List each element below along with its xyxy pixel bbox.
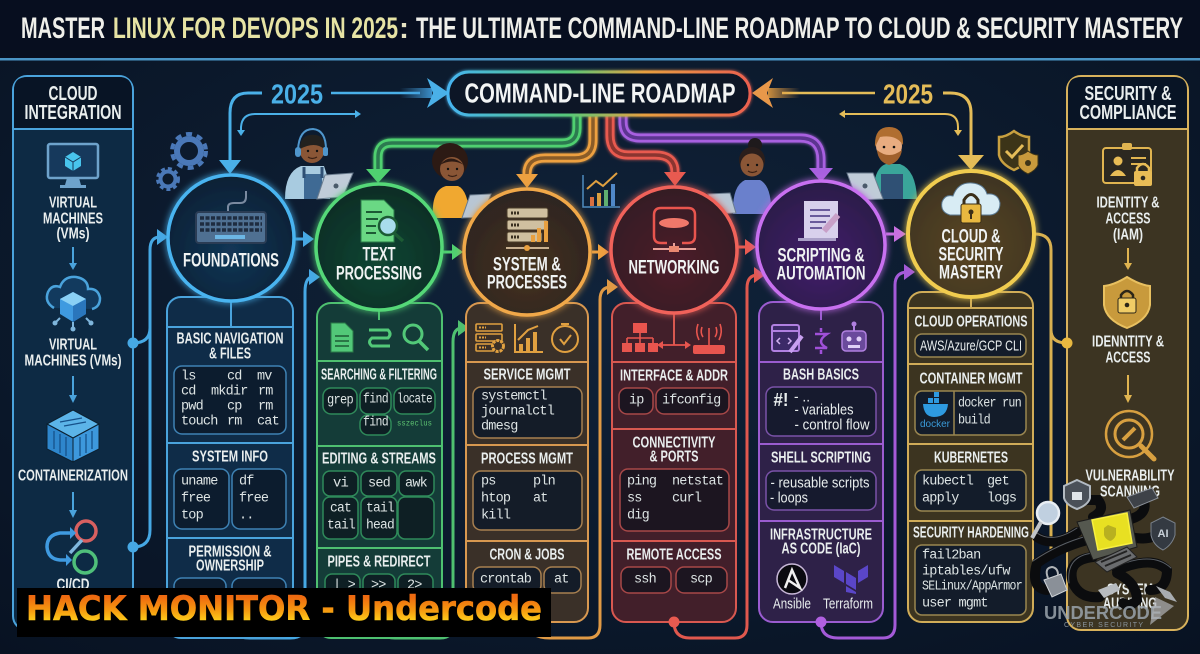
panel: cloud column: SECURITY HARDENING [913,524,1029,542]
icon: document search [361,200,403,242]
panel: networking column: REMOTE ACCESS [626,546,722,564]
icon: octopus mascot with laptop: AI [1158,528,1168,540]
panel: cloud column: kubectl [922,474,974,490]
panel: networking column: dig [627,508,649,524]
stage: system and processes [464,189,590,622]
panel: networking column: & PORTS [650,448,699,466]
panel: system column: pln [533,474,555,490]
text processing circle: PROCESSING [336,264,422,284]
icon: network tree and router [622,323,725,354]
panel: text processing column: 2> [407,578,422,594]
panel: scripting column: - variables [794,402,854,418]
panel: scripting column: - control flow [794,416,870,434]
panel: system column: PROCESS MGMT [481,450,573,468]
scripting circle [757,181,885,309]
panel: networking column: ip [629,394,644,408]
icon: docker: docker [920,419,951,430]
panel: foundations column: rm [227,414,242,430]
panel: foundations column: .. [239,508,254,524]
arrow: right 2025 to roadmap [752,78,984,170]
stage: networking [611,187,737,628]
panel: text processing column: tail [327,518,356,534]
plug [1156,586,1177,602]
top shield [1064,480,1090,509]
banner: hack monitor: HACK MONITOR - Undercode [26,589,542,629]
title band [0,0,1200,60]
panel: security and compliance: AUDITING [1103,596,1157,612]
panel: cloud integration: MACHINES (VMs) [24,352,122,370]
cloud circle [908,171,1034,297]
panel: networking column [612,303,736,628]
icon: person with yellow shirt [432,143,491,218]
watermark: undercode [1044,597,1174,629]
panel: text processing column: vi [333,476,349,492]
panel: networking column: ssh [634,572,656,588]
arrow: left 2025 to roadmap [219,78,449,174]
panel: text processing column: sszeclus [397,420,432,428]
icon: gears [158,134,206,190]
panel: cloud column: AWS/Azure/GCP CLI [920,338,1022,354]
stage: cloud and security mastery [908,171,1034,622]
panel: security and compliance: IDENNTITY & [1092,334,1164,350]
panel: text processing column: EDITING & STREAMS [322,450,436,468]
cloud circle: SECURITY [938,244,1004,266]
panel: foundations column: cat [257,414,279,430]
title: LINUX FOR DEVOPS IN 2025 [113,12,398,45]
panel: cloud column: build [958,414,990,428]
title: MASTER [21,12,105,45]
panel: foundations column: cd [227,370,242,384]
watermark: undercode: CYBER SECURITY [1064,622,1143,629]
connector dots on side panels [128,338,1072,552]
panel: system column: htop [481,492,511,506]
panel: text processing column: find [363,392,388,408]
connector arrowheads [157,226,915,336]
panel: text processing column [317,303,442,638]
panel: foundations column: SYSTEM INFO [192,448,268,466]
panel: foundations column: BASIC NAVIGATION [176,330,284,348]
system circle: PROCESSES [487,272,567,294]
panel: system column [466,303,588,622]
panel: security and compliance: ACCESS [1106,350,1151,366]
panel: security and compliance: SCANNING [1100,484,1160,500]
panel: text processing column: cat [330,502,351,516]
panel: networking column: ifconfig [662,394,720,408]
panel: foundations column: mv [257,370,272,384]
panel: foundations column: PERMISSION & [188,544,272,560]
panel: scripting column: - reusable scripts [770,474,870,492]
icon: keyboard [196,191,266,243]
AI shield [1151,517,1175,550]
networking circle [611,187,737,313]
arrow: right 2025 to roadmap: 2025 [883,78,933,110]
panel: system column: crontab [480,572,532,588]
panel: text processing column: SEARCHING & FILTERING [321,366,437,384]
panel: cloud integration: VIRTUAL [49,336,97,354]
watermark: undercode: UNDERCODE [1044,603,1162,623]
stage: scripting and automation [757,181,885,628]
foundations circle: FOUNDATIONS [183,250,279,272]
icon: person with headphones [285,129,353,199]
icon: ci/cd loops [47,521,96,573]
panel: cloud column: docker run [958,396,1021,412]
panel: system column: journalctl [481,404,555,420]
panel: foundations column: rm [258,384,273,400]
panel: cloud column: user mgmt [922,596,988,612]
magnifier [1037,502,1059,524]
panel: foundations column: top [181,508,204,524]
panel: system column: systemctl [481,390,547,404]
panel: cloud column: apply [922,492,959,506]
padlock [1044,574,1067,597]
icon: identity badge [1103,143,1152,186]
panel: scripting column: - .. [794,388,810,406]
panel: foundations column: touch [181,414,218,430]
panel: security and compliance: (IAM) [1113,226,1143,244]
icon: server chart stopwatch [476,324,578,352]
panel: scripting column: Terraform [823,596,873,612]
panel: networking column: ss [627,492,642,506]
icon: container cube [47,410,99,462]
panel: text processing column: awk [405,476,428,492]
text processing circle [316,184,442,310]
panel: scripting column: BASH BASICS [783,366,859,384]
panel: scripting column: Ansible [773,596,811,612]
icon: virtual machine monitor [48,144,98,188]
panel: scripting column: INFRASTRUCTURE [770,526,872,544]
panel: security and compliance [1067,76,1188,630]
panel: networking column: ping [627,474,656,490]
panel: foundations column: rm [258,400,273,414]
stage: foundations [167,175,294,638]
scripting circle: SCRIPTING & [778,246,865,266]
cloud circle: MASTERY [939,262,1003,284]
icon: bar chart [583,173,620,207]
panel: text processing column: find [363,416,388,430]
panel: networking column: INTERFACE & ADDR [620,368,728,384]
icon: security shields [999,131,1038,174]
panel: foundations column: cp [227,400,242,414]
icon: cloud cube [47,277,100,332]
icon: code robot [772,322,866,354]
networking circle: NETWORKING [628,258,720,278]
panel: cloud integration: CI/CD [56,576,90,594]
usb [1098,583,1120,598]
panel: text processing column: grep [327,394,354,408]
panel: cloud integration: INTEGRATION [24,102,122,124]
panel: cloud column [908,292,1033,622]
panel: foundations column: free [181,492,211,506]
connector lines between stages [133,234,1067,638]
panel: scripting column: - loops [770,490,808,506]
panel: text processing column: tail [366,502,395,516]
panel: system column: ps [481,474,496,490]
scripting circle: AUTOMATION [776,264,866,284]
arrow: left 2025 to roadmap: 2025 [271,78,323,110]
panel: cloud integration: VIRTUAL [49,194,97,212]
panel: foundations column: free [239,492,269,506]
panel: system column: CRON & JOBS [490,546,565,564]
panel: system column: at [554,572,569,588]
panel: foundations column: uname [181,474,218,490]
icon: person with beard [847,127,917,200]
panel: system column: SERVICE MGMT [484,366,571,384]
panel: scripting column [759,302,883,628]
panel: foundations column: cd [181,384,196,400]
icon: person with blue shirt [708,138,771,214]
heading pill: command-line roadmap: COMMAND-LINE ROADMAP [464,78,736,108]
panel: scripting column: SHELL SCRIPTING [771,450,871,466]
top keyboard [1127,488,1158,508]
icon: vulnerability magnifier [1106,411,1154,459]
panel: foundations column: ls [181,370,196,384]
panel: foundations column [167,297,293,638]
text processing circle: TEXT [362,244,396,266]
panel: security and compliance: SYSTEM [1107,582,1153,598]
panel: networking column: netstat [672,474,723,490]
panel: security and compliance: IDENTITY & [1096,194,1160,212]
panel: scripting column: #! [774,390,788,410]
panel: text processing column: >> [371,578,386,594]
panel: text processing column: locate [397,392,433,408]
panel: system column: kill [481,508,511,524]
panel: cloud column: fail2ban [922,548,980,564]
foundations circle [168,175,294,301]
panel: cloud column: KUBERNETES [934,450,1008,466]
trunk arrows from roadmap to stages [366,112,833,188]
panel: foundations column: OWNERSHIP [196,558,264,574]
title: : [399,12,409,45]
panel: cloud column: CONTAINER MGMT [920,370,1023,388]
panel: foundations column: pwd [181,400,203,414]
icon: octopus mascot with laptop [1032,480,1177,605]
panel: text processing column: | > [333,578,356,594]
panel: foundations column: mkdir [211,384,248,400]
icon: ansible [777,564,807,594]
icon: server rack [506,208,549,251]
icon: network monitor [653,208,696,252]
panel: system column: at [533,492,548,506]
panel: security and compliance: ACCESS [1106,210,1151,228]
panel: foundations column: df [239,474,254,490]
panel: cloud column: get [987,474,1009,490]
icon: cloud lock [942,183,1000,223]
panel: text processing column: PIPES & REDIRECT [328,554,431,570]
cloud circle: CLOUD & [942,226,1001,248]
panel: foundations column: & FILES [209,346,251,362]
panel: cloud integration: (VMs) [56,226,90,242]
icon: shield lock [1104,277,1150,328]
panel: scripting column: AS CODE (IaC) [782,540,860,558]
icon: document route magnifier [331,323,428,352]
system circle [464,189,590,315]
panel: text processing column: sed [368,476,390,492]
panel: cloud column: CLOUD OPERATIONS [914,314,1028,330]
panel: cloud column: SELinux/AppArmor [922,580,1022,594]
panel: cloud integration: CLOUD [48,83,98,105]
panel: system column: dmesg [481,420,518,434]
panel: cloud integration: MACHINES [43,210,103,228]
icon: terraform [834,565,868,594]
panel: networking column: curl [672,492,702,506]
panel: networking column: scp [690,572,713,588]
panel: cloud integration [13,76,133,630]
panel: cloud column: logs [987,492,1016,506]
title [21,12,1183,45]
panel: networking column: CONNECTIVITY [632,434,716,452]
laptop [1077,510,1137,560]
icon: script scroll [798,201,838,241]
panel: cloud integration: CONTAINERIZATION [18,468,128,484]
panel: text processing column: head [366,518,394,534]
panel: cloud column: iptables/ufw [922,564,1010,580]
system circle: SYSTEM & [493,254,561,276]
stage: text processing [316,184,442,638]
icon: docker [920,392,951,430]
heading pill: command-line roadmap [448,72,750,115]
